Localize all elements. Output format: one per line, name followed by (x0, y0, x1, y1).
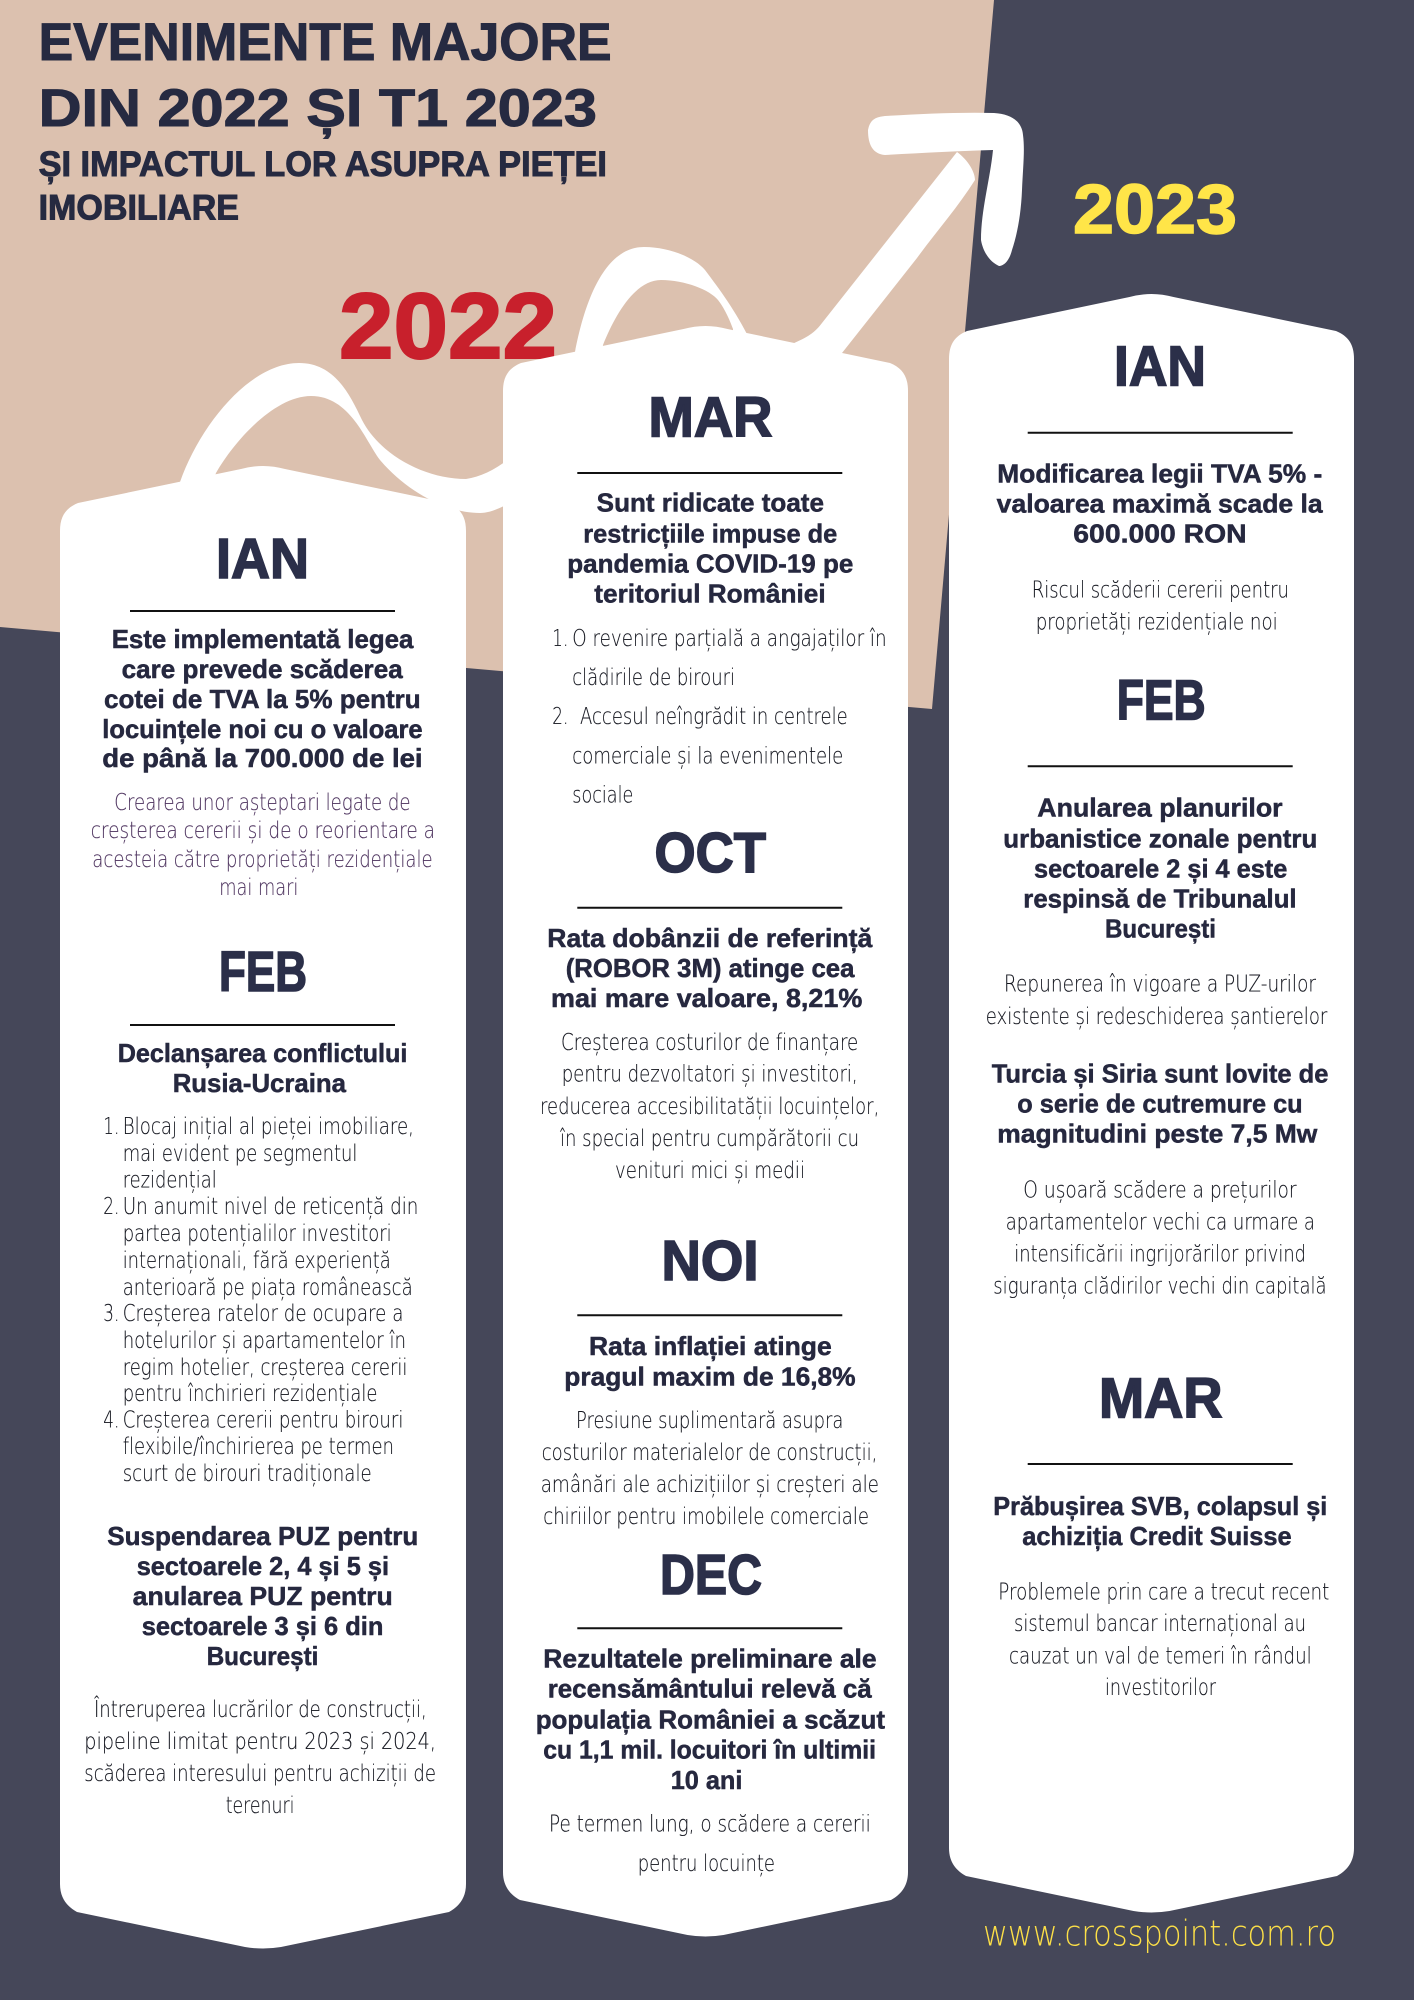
event heading: census: populația României a scăzut (536, 1704, 885, 1734)
event heading: census: cu 1,1 mil. locuitori în ultimii (543, 1734, 876, 1764)
impact text: banking collapse (998, 1579, 1329, 1701)
impact text: ROBOR: venituri mici și medii (615, 1158, 805, 1184)
month: DEC 2022: DEC (660, 1543, 762, 1607)
impact text: inflation: chiriilor pentru imobilele comerciale (543, 1504, 869, 1530)
event heading: COVID restrictions: restricțiile impuse de (583, 518, 837, 548)
numbered list: conflict impact: internaționali, fără experiență (123, 1248, 391, 1274)
impact text: banking collapse: sistemul bancar internațional au (1014, 1611, 1306, 1637)
numbered list: conflict impact: Blocaj inițial al pieței imobiliare, (123, 1114, 414, 1140)
footer: website: www.crosspoint.com.ro (983, 1914, 1336, 1955)
event heading: ROBOR (547, 923, 873, 1013)
impact text: earthquakes: apartamentelor vechi ca urmare a (1006, 1209, 1315, 1235)
event heading: urban plans (1003, 793, 1317, 943)
numbered list: conflict impact: 1. (103, 1114, 119, 1140)
month: NOI 2022: NOI (662, 1229, 758, 1293)
numbered list: COVID impact: 1. (552, 626, 568, 652)
event heading: VAT law change: 600.000 RON (1073, 519, 1247, 549)
numbered list: conflict impact: anterioară pe piața românească (123, 1275, 413, 1301)
impact text: earthquakes: intensificării ingrijorărilor privind (1014, 1241, 1306, 1267)
impact text: PUZ: scăderea interesului pentru achiziții de (84, 1761, 436, 1787)
event heading: VAT law change: valoarea maximă scade la (997, 489, 1323, 519)
impact text: inflation: amânări ale achizițiilor și creșteri ale (541, 1472, 879, 1498)
event heading: PUZ (107, 1521, 418, 1671)
title: EVENIMENTE MAJORE (39, 13, 612, 72)
event heading: COVID restrictions: teritoriul României (594, 578, 826, 608)
event heading: banking collapse: achiziția Credit Suisse (1022, 1521, 1292, 1551)
event heading: TVA 5%: de până la 700.000 de lei (102, 743, 423, 773)
event heading: urban plans: București (1105, 913, 1216, 943)
impact text: VAT law change: Riscul scăderii cererii pentru (1032, 577, 1289, 603)
impact text: VAT law change (1032, 577, 1289, 635)
event heading: conflict: Rusia-Ucraina (173, 1068, 347, 1098)
month: FEB 2023: FEB (1117, 668, 1206, 732)
numbered list: conflict impact: 4. (103, 1408, 119, 1434)
numbered list: conflict impact: 3. (103, 1301, 119, 1327)
impact text: census: Pe termen lung, o scădere a cererii (549, 1812, 871, 1838)
impact text: earthquakes: siguranța clădirilor vechi din capitală (993, 1273, 1327, 1299)
event heading: PUZ: sectoarele 2, 4 și 5 și (137, 1551, 389, 1581)
event heading: TVA 5%: Este implementată legea (112, 624, 414, 654)
event heading: PUZ: Suspendarea PUZ pentru (107, 1521, 418, 1551)
impact text: ROBOR: reducerea accesibilitatății locuințelor, (540, 1094, 879, 1120)
impact text: inflation: costurilor materialelor de construcții, (542, 1440, 877, 1466)
impact text: urban plans (986, 972, 1328, 1030)
panel: 2023 column (949, 294, 1354, 1912)
numbered list: conflict impact (103, 1114, 418, 1487)
numbered list: conflict impact: pentru închirieri rezidențiale (123, 1381, 377, 1407)
event heading: census (536, 1644, 885, 1795)
event heading: earthquakes: o serie de cutremure cu (1017, 1089, 1303, 1119)
impact text: ROBOR (540, 1030, 879, 1184)
year label: 2022: 2022 (339, 274, 557, 378)
numbered list: conflict impact: mai evident pe segmentul (123, 1141, 357, 1167)
panel: 2022 column one (60, 466, 466, 1948)
month: MAR 2023: MAR (1099, 1367, 1222, 1431)
impact text: ROBOR: pentru dezvoltatori și investitori, (562, 1062, 858, 1088)
impact text: ROBOR: în special pentru cumpărătorii cu (559, 1126, 859, 1152)
numbered list: COVID impact: 2. (552, 704, 568, 730)
numbered list: COVID impact: clădirile de birouri (572, 665, 735, 691)
impact text: TVA 5% (91, 790, 435, 901)
title: DIN 2022 ȘI T1 2023 (39, 79, 597, 139)
title: ȘI IMPACTUL LOR ASUPRA PIEȚEI (39, 145, 607, 184)
event heading: PUZ: București (207, 1641, 318, 1671)
event heading: census: 10 ani (671, 1765, 742, 1795)
impact text: earthquakes (993, 1177, 1327, 1299)
impact text: census (549, 1812, 871, 1877)
arrow: rising white line linking the columns (176, 113, 1024, 513)
event heading: urban plans: Anularea planurilor (1037, 793, 1283, 823)
impact text: PUZ: terenuri (226, 1793, 294, 1819)
event heading: conflict: Declanșarea conflictului (118, 1038, 407, 1068)
impact text: VAT law change: proprietăți rezidențiale noi (1036, 609, 1278, 635)
event heading: VAT law change: Modificarea legii TVA 5% - (997, 459, 1322, 489)
year label: 2023: 2023 (1073, 170, 1237, 248)
event heading: ROBOR: Rata dobânzii de referință (547, 923, 873, 953)
numbered list: conflict impact: 2. (103, 1194, 119, 1220)
month: OCT 2022: OCT (654, 821, 766, 885)
event heading: census: recensământului relevă că (548, 1674, 872, 1704)
impact text: banking collapse: Problemele prin care a trecut recent (998, 1579, 1329, 1605)
title (39, 13, 612, 228)
event heading: ROBOR: mai mare valoare, 8,21% (551, 983, 862, 1013)
impact text: PUZ (84, 1695, 436, 1819)
numbered list: conflict impact: hotelurilor și apartamentelor în (123, 1328, 406, 1354)
impact text: ROBOR: Creșterea costurilor de finanțare (561, 1030, 858, 1056)
numbered list: conflict impact: partea potențialilor investitori (123, 1221, 392, 1247)
numbered list: conflict impact: flexibile/închirierea pe termen (123, 1434, 394, 1460)
event heading: census: Rezultatele preliminare ale (543, 1644, 877, 1674)
impact text: TVA 5%: acesteia către proprietăți rezidențiale (92, 847, 433, 873)
numbered list: COVID impact: comerciale și la evenimentele (572, 743, 843, 769)
panel: 2022 column two (503, 326, 908, 1936)
event heading: PUZ: sectoarele 3 și 6 din (142, 1611, 383, 1641)
numbered list: COVID impact: O revenire parțială a angajaților în (572, 626, 887, 652)
event heading: inflation: pragul maxim de 16,8% (564, 1362, 856, 1392)
event heading: ROBOR: (ROBOR 3M) atinge cea (566, 953, 855, 983)
impact text: TVA 5%: mai mari (219, 875, 298, 901)
event heading: TVA 5% (102, 624, 423, 773)
numbered list: conflict impact: Creșterea cererii pentru birouri (123, 1408, 403, 1434)
numbered list: COVID impact: Accesul neîngrădit in centrele (580, 704, 848, 730)
numbered list: conflict impact: scurt de birouri tradiționale (123, 1461, 372, 1487)
month: IAN 2023: IAN (1114, 335, 1206, 399)
event heading: TVA 5%: locuințele noi cu o valoare (102, 714, 423, 744)
event heading: TVA 5%: care prevede scăderea (122, 654, 403, 684)
event heading: TVA 5%: cotei de TVA la 5% pentru (104, 684, 421, 714)
month: FEB 2022: FEB (219, 940, 307, 1004)
numbered list: conflict impact: Creșterea ratelor de ocupare a (123, 1301, 403, 1327)
event heading: VAT law change (997, 459, 1323, 549)
impact text: PUZ: pipeline limitat pentru 2023 și 2024, (84, 1729, 436, 1755)
event heading: inflation (564, 1331, 856, 1392)
month: MAR 2022: MAR (648, 386, 772, 450)
impact text: inflation (541, 1408, 879, 1530)
impact text: earthquakes: O ușoară scădere a prețurilor (1023, 1177, 1297, 1203)
event heading: COVID restrictions: Sunt ridicate toate (597, 488, 824, 518)
event heading: COVID restrictions (567, 488, 853, 608)
event heading: banking collapse (993, 1491, 1327, 1551)
month: IAN 2022: IAN (216, 527, 309, 591)
impact text: TVA 5%: Crearea unor așteptari legate de (114, 790, 411, 816)
impact text: TVA 5%: creșterea cererii și de o reorientare a (91, 818, 435, 844)
numbered list: COVID impact (552, 626, 887, 808)
numbered list: conflict impact: rezidențial (123, 1168, 217, 1194)
event heading: COVID restrictions: pandemia COVID-19 pe (567, 548, 853, 578)
numbered list: COVID impact: sociale (572, 782, 633, 808)
event heading: urban plans: sectoarele 2 și 4 este (1034, 853, 1287, 883)
impact text: inflation: Presiune suplimentară asupra (576, 1408, 843, 1434)
event heading: banking collapse: Prăbușirea SVB, colapsul și (993, 1491, 1327, 1521)
impact text: banking collapse: investitorilor (1105, 1675, 1216, 1701)
numbered list: conflict impact: Un anumit nivel de reticență din (123, 1194, 418, 1220)
event heading: earthquakes: Turcia și Siria sunt lovite de (992, 1059, 1328, 1089)
impact text: urban plans: Repunerea în vigoare a PUZ-urilor (1004, 972, 1316, 998)
impact text: urban plans: existente și redeschiderea șantierelor (986, 1004, 1328, 1030)
event heading: urban plans: urbanistice zonale pentru (1003, 823, 1317, 853)
event heading: earthquakes (992, 1059, 1328, 1149)
event heading: PUZ: anularea PUZ pentru (133, 1581, 393, 1611)
event heading: urban plans: respinsă de Tribunalul (1023, 883, 1297, 913)
event heading: inflation: Rata inflației atinge (589, 1331, 832, 1361)
title: IMOBILIARE (39, 189, 239, 228)
numbered list: conflict impact: regim hotelier, creșterea cererii (123, 1355, 407, 1381)
impact text: banking collapse: cauzat un val de temeri în rândul (1009, 1643, 1312, 1669)
event heading: earthquakes: magnitudini peste 7,5 Mw (997, 1119, 1318, 1149)
impact text: PUZ: Întreruperea lucrărilor de construcții, (94, 1695, 427, 1723)
event heading: conflict (118, 1038, 407, 1098)
impact text: census: pentru locuințe (638, 1851, 775, 1877)
background: beige shape (0, 0, 994, 709)
